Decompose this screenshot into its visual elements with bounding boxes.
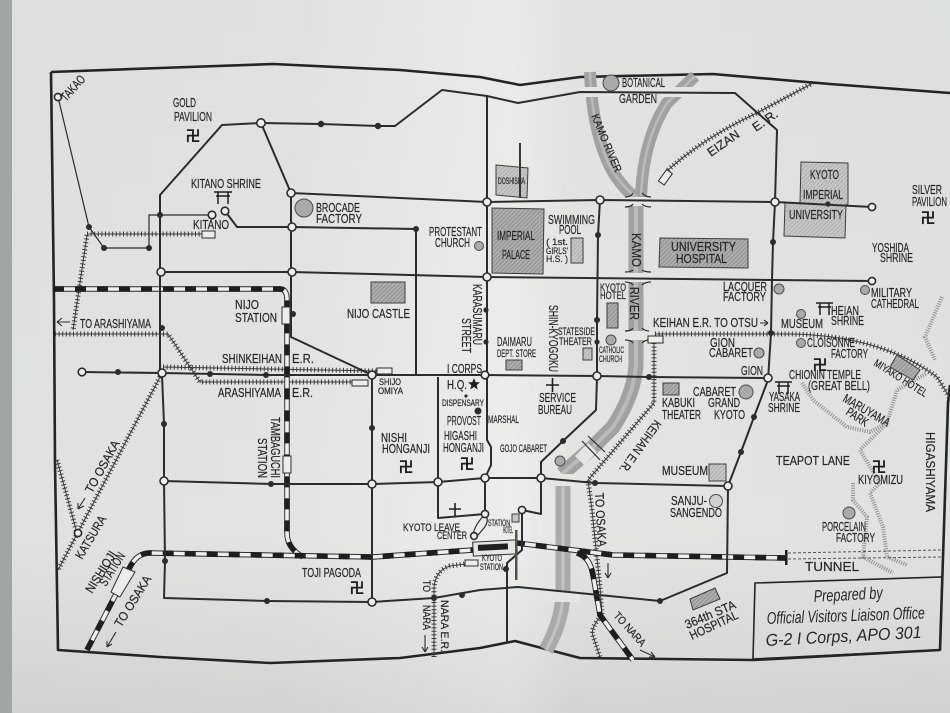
labels: river and north east: CHIONIN TEMPLE bbox=[789, 368, 861, 382]
labels: south east: KABUKI bbox=[662, 396, 695, 410]
labels: central downtown: STATION bbox=[488, 518, 510, 528]
labels: river and north east: UNIVERSITY bbox=[789, 208, 843, 222]
labels: central downtown: GOJO CABARET bbox=[500, 443, 547, 455]
stop nodes bbox=[54, 93, 876, 606]
labels: south east: SANJU- bbox=[671, 494, 707, 508]
streetcar routes bbox=[58, 90, 872, 642]
labels: south east: PARK bbox=[843, 405, 872, 430]
labels: river and north east: BOTANICAL bbox=[622, 76, 665, 90]
labels: river and north east: HOSPITAL bbox=[676, 252, 727, 266]
credit box: Prepared by bbox=[753, 577, 942, 659]
labels: river and north east: IMPERIAL bbox=[803, 188, 843, 202]
labels: central downtown: PALACE bbox=[502, 248, 530, 262]
staple and fold marks bbox=[515, 143, 521, 580]
labels: central downtown: PROVOST bbox=[447, 414, 481, 428]
labels: central downtown: DISPENSARY bbox=[442, 398, 484, 408]
labels: south east: SHRINE bbox=[768, 401, 800, 415]
building: Daimaru bbox=[506, 360, 522, 370]
building: swimming pool bbox=[571, 238, 583, 263]
labels: north west: E.R. bbox=[292, 352, 314, 366]
labels: north west: PROTESTANT bbox=[429, 225, 482, 239]
labels: central downtown: ( 1st. bbox=[546, 237, 568, 247]
labels: south west: STATION bbox=[97, 550, 128, 589]
JNR railway lines bbox=[53, 289, 787, 660]
labels: central downtown: NARA bbox=[420, 605, 432, 631]
temple symbols: 卍 bbox=[920, 207, 936, 228]
temple symbols bbox=[186, 125, 936, 598]
labels: central downtown: CHURCH bbox=[599, 354, 622, 364]
labels: north west: OMIYA bbox=[378, 386, 403, 396]
building: Kyoto Imperial University bbox=[784, 162, 848, 238]
labels: river and north east: HEIAN bbox=[831, 304, 859, 318]
crosses: church markers bbox=[449, 378, 559, 516]
labels: river and north east: MIYAKO HOTEL bbox=[871, 357, 930, 400]
temple symbols: 卍 bbox=[350, 577, 365, 598]
labels: river and north east: (GREAT BELL) bbox=[808, 379, 870, 393]
labels: central downtown: DEPT. STORE bbox=[497, 348, 536, 360]
labels: central downtown: KYOTO LEAVE bbox=[403, 522, 460, 534]
labels: river and north east: KAMO RIVER bbox=[588, 112, 624, 174]
labels: central downtown: POOL bbox=[559, 223, 581, 237]
labels: south east: FACTORY bbox=[836, 531, 875, 545]
labels: north west: TO ARASHIYAMA bbox=[80, 317, 151, 331]
labels: river and north east: CLOISONNE bbox=[807, 336, 855, 350]
labels: central downtown: KYOTO bbox=[482, 553, 502, 563]
labels: river and north east: FACTORY bbox=[723, 290, 766, 304]
labels: south east: TEAPOT LANE bbox=[776, 454, 850, 468]
labels: north west: STREET bbox=[459, 318, 473, 353]
temple symbols: 卍 bbox=[812, 354, 828, 375]
labels: south east: KIYOMIZU bbox=[858, 473, 903, 487]
labels: central downtown: STATION bbox=[480, 562, 503, 572]
labels: central downtown: GIRLS' bbox=[546, 246, 568, 256]
temple symbols: 卍 bbox=[398, 456, 414, 477]
labels: south east: PORCELAIN bbox=[822, 520, 866, 534]
labels: south east: KEIHAN E.R. bbox=[616, 417, 664, 476]
labels: central downtown: HOTEL bbox=[600, 290, 626, 302]
labels: north west: SHINKEIHAN bbox=[222, 352, 282, 366]
labels: north west: CHURCH bbox=[435, 236, 470, 250]
labels: central downtown: HIGASHI bbox=[444, 429, 477, 443]
labels: river and north east: CATHEDRAL bbox=[871, 297, 919, 311]
labels: central downtown: STATESIDE bbox=[558, 326, 595, 338]
labels: central downtown: TO bbox=[420, 580, 432, 592]
labels: north west: BROCADE bbox=[316, 201, 360, 215]
labels: central downtown: BUREAU bbox=[538, 403, 572, 417]
tunnel dashes bbox=[785, 550, 942, 565]
labels: river and north east: MUSEUM bbox=[781, 317, 823, 331]
labels: south east: MUSEUM bbox=[662, 464, 708, 478]
labels: south east: 364th STA bbox=[683, 598, 738, 632]
labels: river and north east: GARDEN bbox=[619, 92, 657, 106]
labels: north west: STATION bbox=[255, 438, 269, 478]
building: Kabuki Theater bbox=[663, 383, 679, 395]
labels: south west: TO OSAKA bbox=[82, 437, 123, 495]
labels: river and north east: SHRINE bbox=[831, 314, 864, 328]
building: Imperial Palace bbox=[492, 208, 544, 274]
labels: north west: KITANO bbox=[193, 218, 229, 232]
building: Doshisha bbox=[496, 165, 528, 198]
river bridges bbox=[545, 87, 700, 602]
labels: central downtown: KYOTO bbox=[600, 282, 626, 294]
labels: central downtown: SHIN-KYOGOKU bbox=[546, 305, 560, 372]
labels: river and north east: KAMO bbox=[629, 233, 643, 267]
labels: south west: TO OSAKA bbox=[112, 572, 155, 630]
labels: south east: YASAKA bbox=[769, 390, 800, 404]
labels: north west: SHIJO bbox=[379, 377, 401, 387]
labels: south east: TUNNEL bbox=[805, 560, 859, 574]
building: 364th Station Hospital bbox=[690, 588, 720, 610]
labels: north west: KITANO SHRINE bbox=[191, 177, 261, 191]
building: University Hospital bbox=[659, 238, 748, 268]
black stops bbox=[86, 121, 831, 604]
labels: river and north east: SHRINE bbox=[880, 251, 913, 265]
railway stations bbox=[111, 307, 519, 597]
labels: north west: KARASUMARU bbox=[470, 284, 484, 345]
labels: north west: PAVILION bbox=[174, 110, 212, 124]
labels: south west: KATSURA bbox=[73, 513, 110, 562]
labels: river and north east: MILITARY bbox=[871, 286, 912, 300]
labels: river and north east: RIVER bbox=[627, 287, 641, 320]
labels: river and north east: E. R. bbox=[750, 107, 781, 134]
labels: river and north east: UNIVERSITY bbox=[671, 240, 737, 254]
labels: south east: HOSPITAL bbox=[687, 608, 740, 643]
building: Stateside Theater bbox=[583, 348, 592, 360]
temple symbols: 卍 bbox=[460, 453, 475, 474]
building: Miyako Hotel bbox=[890, 355, 920, 380]
labels: south west: TOJI PAGODA bbox=[302, 566, 361, 580]
labels: central downtown: H.Q. bbox=[447, 378, 467, 392]
labels: north west: FACTORY bbox=[316, 212, 363, 226]
temple symbols: 卍 bbox=[872, 456, 887, 477]
landmark circles bbox=[295, 75, 870, 519]
station rectangles on electric lines bbox=[202, 170, 672, 566]
labels: central downtown: NISHI bbox=[381, 431, 407, 445]
electric railway tracks bbox=[55, 83, 950, 657]
labels: central downtown: H.S. ) bbox=[546, 254, 568, 264]
credit box: Prepared by: G-2 I Corps, APO 301 bbox=[765, 623, 922, 650]
labels: central downtown: DAIMARU bbox=[497, 335, 532, 349]
labels: south east: HIGASHIYAMA bbox=[923, 432, 937, 513]
labels: central downtown: SWIMMING bbox=[548, 213, 595, 227]
labels: river and north east: KYOTO bbox=[810, 168, 839, 182]
labels: central downtown: HOTEL bbox=[503, 525, 513, 535]
labels: north west: GOLD bbox=[173, 96, 196, 110]
labels: south east: MARUYAMA bbox=[840, 391, 893, 430]
labels: south east: TO OSAKA bbox=[592, 492, 609, 548]
labels: south west bbox=[73, 437, 361, 630]
labels: central downtown: HONGANJI bbox=[443, 441, 484, 455]
labels: central downtown: CATHOLIC bbox=[599, 345, 624, 355]
star: headquarters bbox=[468, 378, 480, 390]
labels: central downtown: HONGANJI bbox=[382, 442, 430, 456]
labels: north west: TAMBAGUCHI bbox=[268, 417, 282, 478]
labels: south west: NISHIOJI bbox=[83, 548, 119, 596]
river: Kamo River bbox=[546, 72, 695, 650]
labels: central downtown: THEATER bbox=[559, 336, 592, 348]
labels: central downtown: MARSHAL bbox=[488, 414, 519, 426]
labels: central downtown: DOSHISHA bbox=[498, 176, 525, 186]
labels: river and north east: GION bbox=[710, 336, 735, 350]
hiking trails bbox=[802, 297, 942, 573]
labels: central downtown: CENTER bbox=[437, 530, 467, 542]
credit box: Prepared by: Prepared by bbox=[813, 583, 884, 606]
building: Kyoto Hotel bbox=[607, 303, 618, 328]
labels: north west bbox=[58, 72, 484, 478]
labels: south east: THEATER bbox=[662, 408, 701, 422]
labels: central downtown: NARA E.R. bbox=[438, 600, 450, 652]
labels: river and north east: CABARET bbox=[709, 346, 753, 360]
temple symbols: 卍 bbox=[186, 125, 201, 146]
labels: river and north east: KEIHAN E.R. TO OTSU bbox=[653, 316, 758, 330]
labels: south east: GRAND bbox=[708, 396, 740, 410]
shrine gate icons bbox=[214, 192, 833, 394]
labels: north west: I CORPS bbox=[447, 362, 482, 376]
labels: river and north east: LACQUER bbox=[723, 280, 767, 294]
labels: central downtown: IMPERIAL bbox=[497, 229, 535, 243]
labels: north west: NIJO bbox=[235, 298, 259, 312]
labels: river and north east: FACTORY bbox=[831, 347, 868, 361]
labels: south east: SANGENDO bbox=[670, 506, 722, 520]
buildings bbox=[371, 162, 920, 610]
labels: river and north east: YOSHIDA bbox=[872, 241, 909, 255]
labels: central downtown bbox=[381, 176, 626, 652]
building: Museum bbox=[709, 464, 726, 481]
labels: central downtown: SERVICE bbox=[539, 391, 576, 405]
labels: river and north east: GION bbox=[741, 364, 763, 378]
map border frame bbox=[51, 64, 950, 663]
labels: north west: TAKAO bbox=[58, 72, 88, 104]
labels: river and north east: EIZAN bbox=[705, 127, 742, 159]
labels: south east bbox=[592, 385, 937, 650]
arrows bbox=[57, 318, 768, 657]
labels: south east: TO NARA bbox=[611, 610, 648, 650]
labels: south east: CABARET bbox=[693, 385, 736, 399]
building: Nijo Castle bbox=[371, 282, 405, 303]
labels: north west: E.R. bbox=[292, 386, 313, 400]
labels: south east: KYOTO bbox=[714, 408, 745, 422]
labels: north west: STATION bbox=[235, 311, 277, 325]
labels: north west: NIJO CASTLE bbox=[347, 307, 410, 321]
labels: river and north east bbox=[588, 76, 947, 400]
labels: north west: ARASHIYAMA bbox=[218, 386, 282, 400]
